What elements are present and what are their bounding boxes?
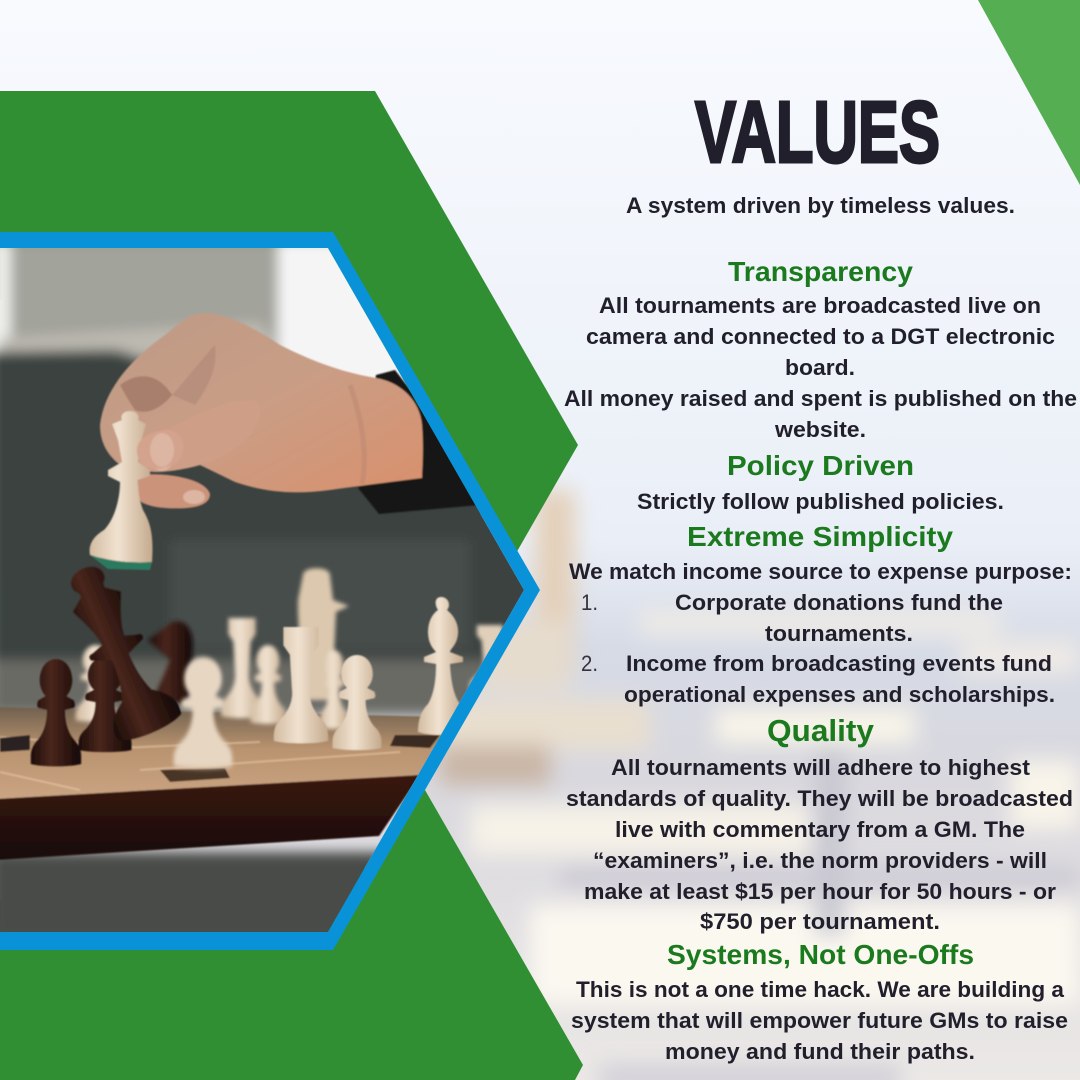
title: VALUES: [695, 84, 940, 181]
text: Policy Driven body: Strictly follow published policies.: [637, 489, 1004, 514]
numbered list: tournaments.: [765, 621, 913, 646]
numbered list: [581, 590, 1055, 707]
section: Policy Driven: [637, 450, 1004, 514]
chess board: [0, 707, 450, 860]
white bishop: [418, 597, 464, 735]
text: Transparency body: All tournaments are broadcasted live on: [599, 293, 1041, 318]
text: Quality body: live with commentary from a GM. The: [615, 817, 1025, 842]
text: Transparency body: camera and connected to a DGT electronic: [586, 324, 1055, 349]
text: Transparency body: All money raised and spent is published on the: [564, 386, 1077, 411]
section: Extreme Simplicity: [569, 521, 1072, 707]
blurred back chess pieces: [76, 568, 510, 729]
text: Quality body: “examiners”, i.e. the norm providers - will: [593, 848, 1047, 873]
text: Extreme Simplicity intro: We match income source to expense purpose:: [569, 559, 1072, 584]
blue hexagon frame around photo: [0, 232, 540, 950]
subtitle: A system driven by timeless values.: [626, 193, 1015, 218]
green chevron panel: bottom: [0, 790, 583, 1080]
photo backdrop: [0, 240, 560, 942]
text: Systems body: money and fund their paths.: [665, 1039, 975, 1064]
section: Quality: [566, 713, 1073, 934]
section: Systems, Not One-Offs: [571, 939, 1068, 1064]
heading: Policy Driven: Policy Driven: [727, 450, 914, 481]
text: Systems body: [571, 977, 1068, 1064]
front chess pieces: [31, 555, 464, 768]
fallen black queen: [70, 566, 182, 741]
text: Transparency body: board.: [785, 355, 855, 380]
text: Quality body: $750 per tournament.: [700, 909, 940, 934]
numbered list: Income from broadcasting events fund: [626, 651, 1052, 676]
heading: Transparency: Transparency: [728, 256, 913, 287]
numbered list: 2.: [581, 651, 598, 676]
text: Quality body: [566, 755, 1073, 934]
text: Quality body: All tournaments will adhere to highest: [611, 755, 1031, 780]
heading: Systems, Not One-Offs: Systems, Not One-Offs: [667, 939, 974, 970]
decorative green triangle top right: [978, 0, 1080, 185]
text: Transparency body: website.: [774, 417, 866, 442]
text: Quality body: make at least $15 per hour for 50 hours - or: [584, 879, 1056, 904]
section: Transparency: [564, 256, 1077, 442]
text: Systems body: system that will empower future GMs to raise: [571, 1008, 1068, 1033]
numbered list: 1.: [581, 590, 598, 615]
numbered list: Corporate donations fund the: [675, 590, 1003, 615]
heading: Quality: Quality: [767, 713, 875, 748]
white queen held in hand: [90, 411, 183, 570]
text: Systems body: This is not a one time hack. We are building a: [576, 977, 1065, 1002]
text: Quality body: standards of quality. They will be broadcasted: [566, 786, 1073, 811]
hand and sleeve: [100, 313, 480, 514]
text: Transparency body: [564, 293, 1077, 442]
heading: Extreme Simplicity: Extreme Simplicity: [687, 521, 953, 552]
green chevron panel: top: [0, 91, 578, 555]
numbered list: operational expenses and scholarships.: [624, 682, 1055, 707]
photo: hand moving chess piece: [0, 240, 560, 942]
